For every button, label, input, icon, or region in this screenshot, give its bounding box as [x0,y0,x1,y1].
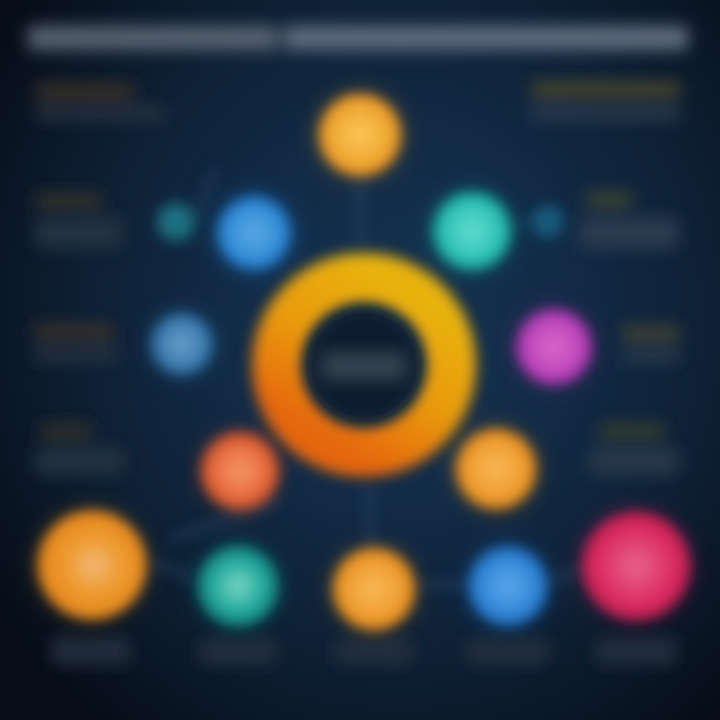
label: top left [36,84,166,120]
label: top right [530,82,680,120]
small node: upper right [532,206,564,238]
label: right 3 [622,326,680,362]
label: left 4 [36,424,124,475]
right column text [530,82,680,475]
title [28,26,688,50]
node: green bottom [198,546,278,626]
label: left 2 [36,193,122,249]
label: right 4 [590,424,678,475]
connector lines [150,170,585,585]
node: steel blue left [151,313,213,375]
node: teal upper right [433,192,511,270]
small node: upper left [157,203,195,241]
label: left 3 [34,324,118,361]
node: large pink [582,512,690,620]
bottom captions [52,638,676,664]
left column text [34,84,166,475]
node: coral lower left [201,432,279,510]
node: blue bottom [468,546,548,626]
node: magenta right [516,309,592,385]
node: top yellow [319,94,401,176]
label: right 2 [580,192,678,249]
node: blue upper left [217,196,291,270]
glow halos [36,91,692,631]
ring centre [308,309,420,421]
node: large orange [38,511,146,619]
node: amber bottom [333,548,415,630]
node: amber lower right [456,429,536,509]
central ring [277,278,451,452]
